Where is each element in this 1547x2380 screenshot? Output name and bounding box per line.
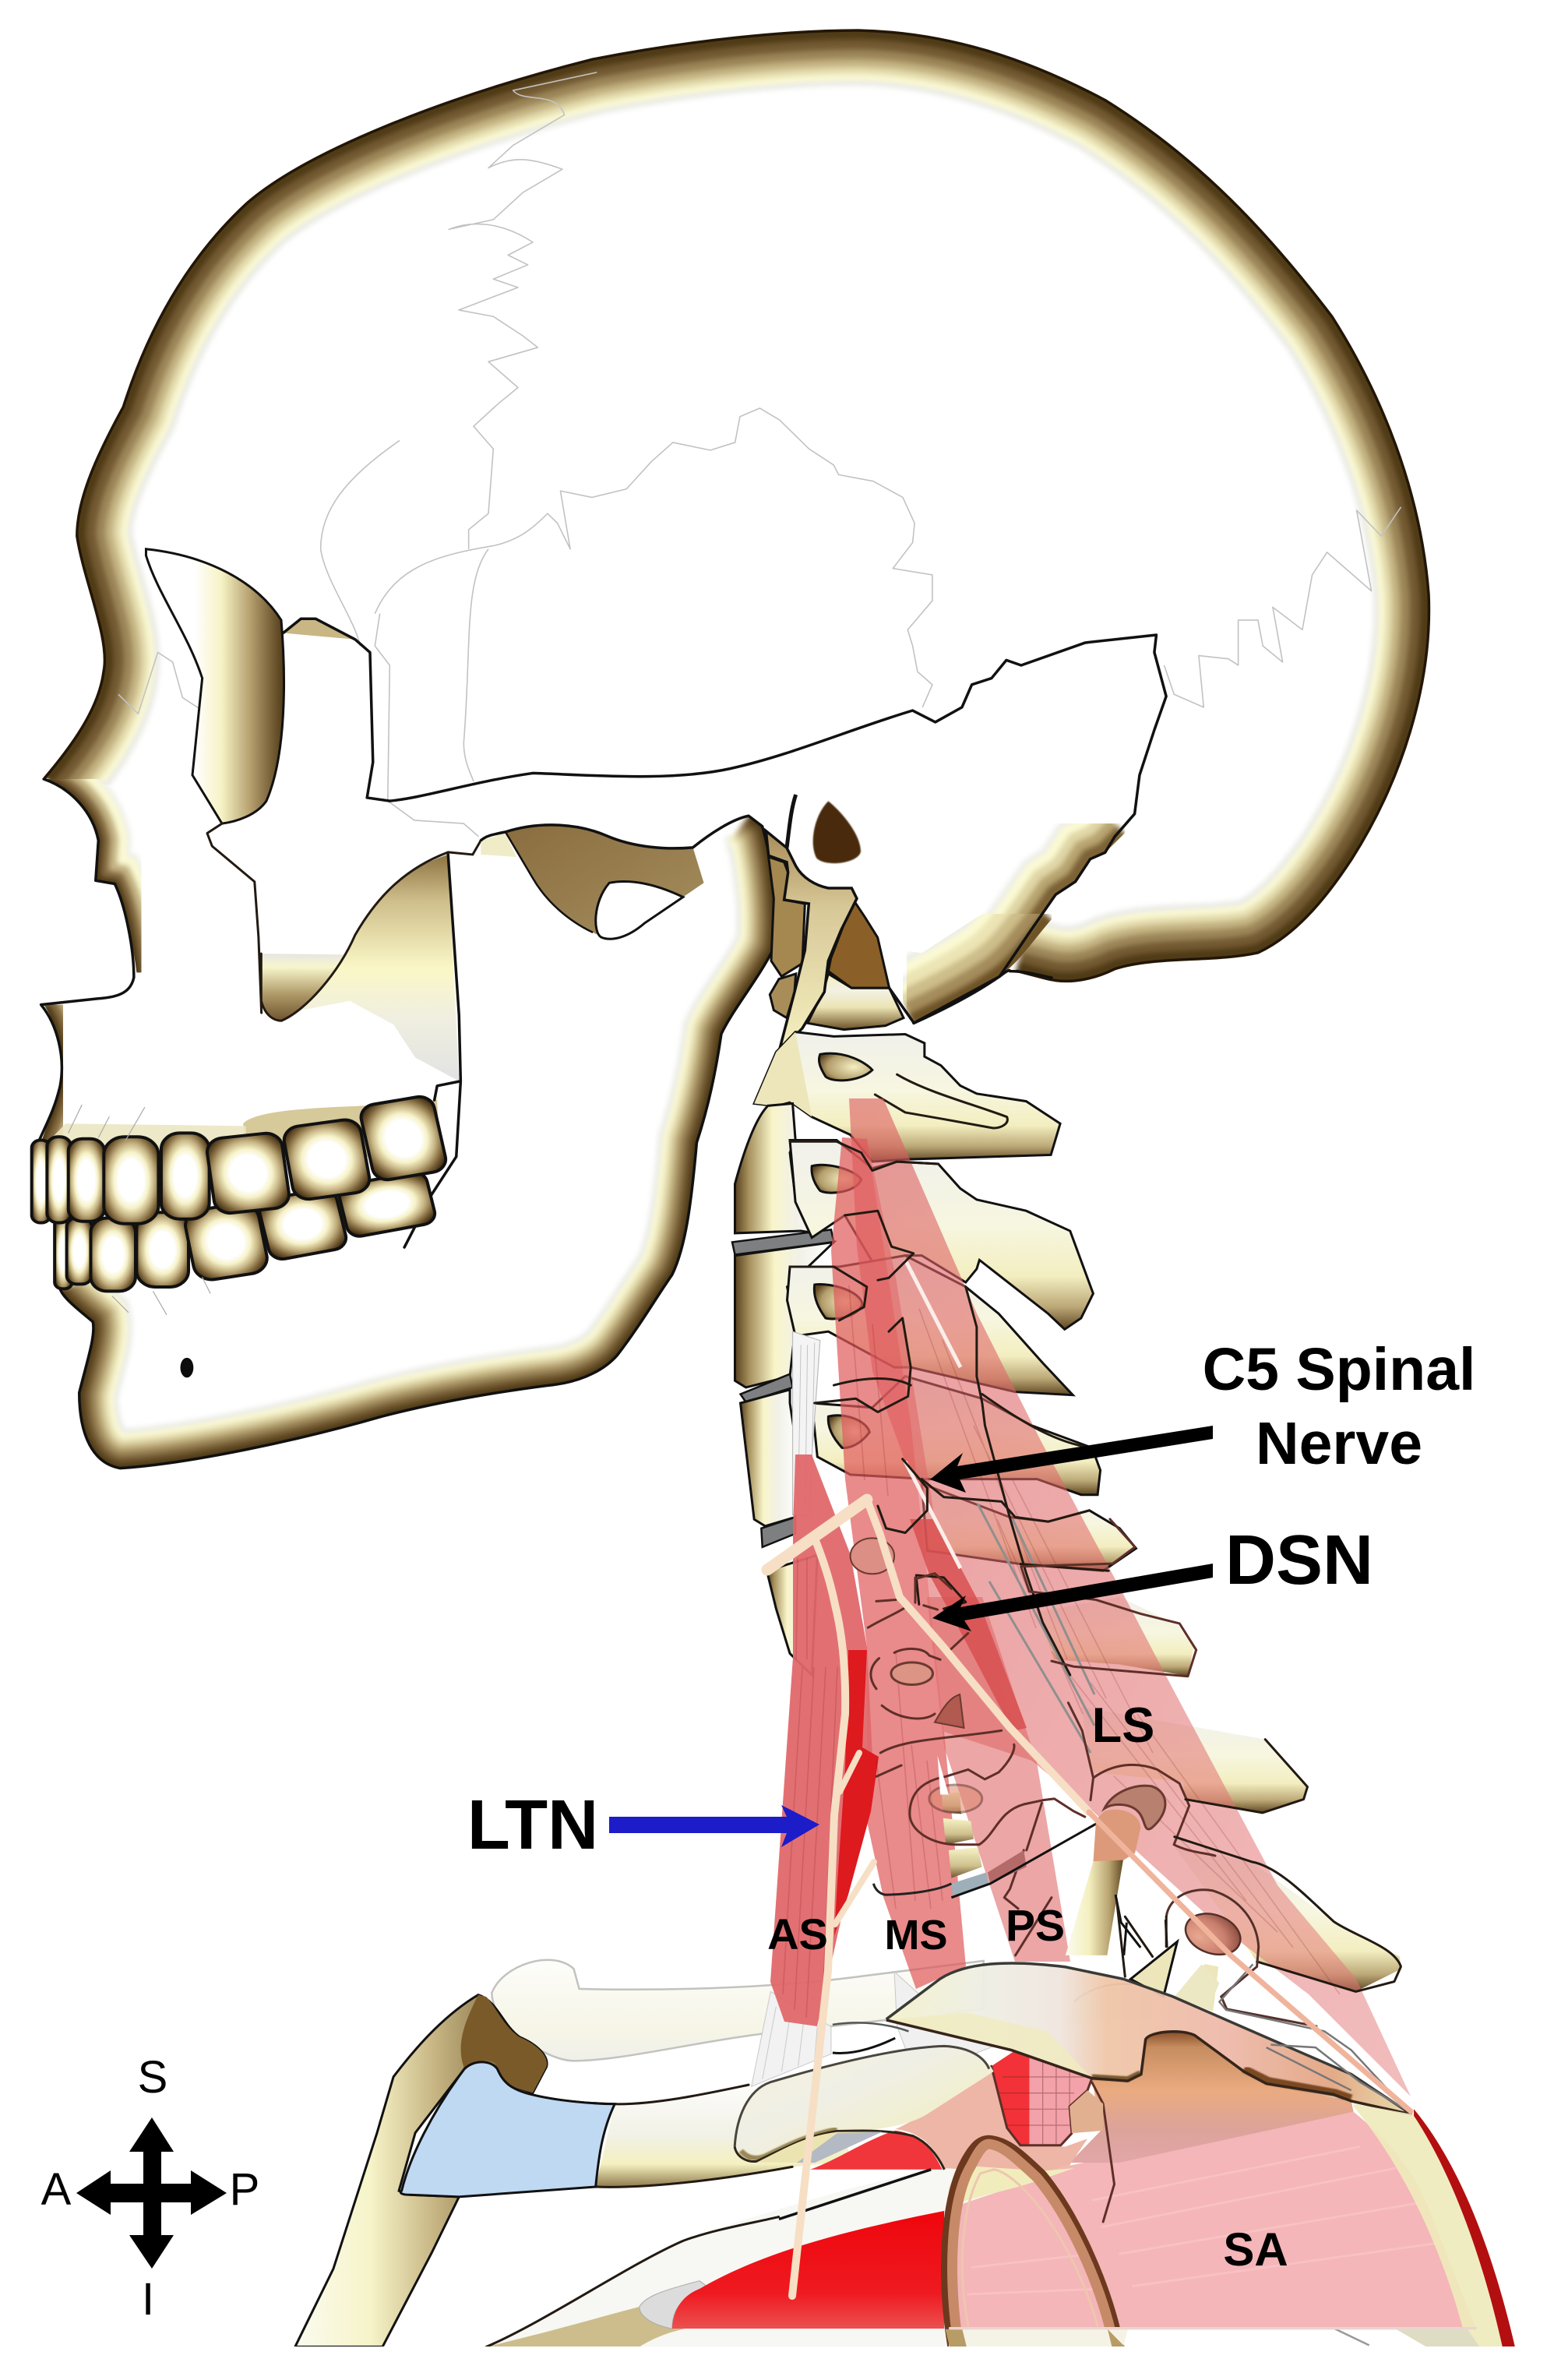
cranium bone rim [44, 30, 1429, 981]
left tan wedge [769, 857, 805, 976]
big clavicle [735, 2046, 994, 2161]
T2 ring [1166, 1890, 1317, 2026]
rib white tip behind spine [1065, 1987, 1154, 2026]
left condyle blob [770, 974, 796, 1018]
C7 cream patches [943, 1818, 974, 1845]
T2 crescent [1179, 1906, 1248, 1962]
gray tendon lines [978, 1504, 1094, 1753]
C7 tip outline [1186, 1740, 1308, 1813]
T1 tip [1175, 1846, 1401, 1991]
darker strip between MS and LS [910, 1519, 1027, 1731]
jaw, zygoma, coronoid and teeth [32, 779, 775, 1469]
C1 vertebra [754, 1032, 1060, 1162]
cream acromial border [1354, 2103, 1503, 2347]
disc C3-C4 [741, 1374, 793, 1402]
disc C4-C5 [761, 1517, 795, 1547]
C1 lateral mass line [875, 1074, 1007, 1128]
mastoid jagged bone band [914, 834, 1125, 1023]
serratus streaks [967, 2147, 1436, 2294]
vertebrae C6 to T1 with muscle overlay [868, 1519, 1215, 1955]
label: SA: SA [1223, 2223, 1288, 2276]
rib, clavicle and scapula bones [295, 1960, 993, 2347]
mandible rim [60, 816, 775, 1469]
serratus anterior pink sheet [944, 2112, 1476, 2329]
white gaps [938, 1756, 949, 1795]
peach pad [1070, 2090, 1103, 2133]
spine brown shadow [1092, 2069, 1351, 2099]
C5 foramen ring [851, 1538, 894, 1574]
tendinous white strips [905, 1260, 960, 1568]
lower rib [486, 2157, 984, 2347]
anterior scalene [770, 1454, 872, 2026]
acromion arch inner [953, 2144, 1114, 2347]
upper lip rim [42, 1005, 63, 1141]
arch cream cap [948, 2166, 1074, 2207]
orbit [146, 549, 1166, 1013]
label: DSN: DSN [1225, 1521, 1373, 1599]
long thoracic nerve [792, 1539, 845, 2296]
C7 foramen [929, 1785, 982, 1813]
T1 crescent [1105, 1786, 1165, 1829]
C3 transverse process [787, 1256, 1073, 1395]
label: LTN: LTN [467, 1786, 598, 1864]
acromion arch outer [945, 2138, 1121, 2347]
lower cervical white transverse tendons [793, 1331, 820, 1515]
rib cream tips [1175, 1964, 1219, 2010]
spine lower cream [886, 2012, 1092, 2079]
C5 body [766, 1555, 817, 1675]
thoracic gray rib lines [1219, 1964, 1405, 2109]
right brown wedge [828, 901, 890, 988]
arrow: LTN [609, 1805, 819, 1847]
T1 rib neck [1066, 1856, 1124, 1955]
label: LS: LS [1092, 1698, 1154, 1753]
peach sheet under spine [1070, 2032, 1354, 2163]
label: MS: MS [885, 1912, 947, 1959]
C3 body [735, 1242, 833, 1387]
clavicle lower shading [741, 2129, 837, 2158]
middle scalene [831, 1137, 966, 1989]
levator striations [919, 1309, 1340, 1994]
C6 tip [1037, 1597, 1193, 1676]
C2 body [734, 1102, 808, 1234]
C2 transverse process [790, 1141, 1093, 1329]
rib line [779, 2170, 931, 2220]
styloid process [766, 831, 857, 1052]
lower red muscle fade band [949, 2327, 1476, 2329]
mastoid outline [914, 837, 1115, 1023]
C4 body [741, 1390, 798, 1526]
first rib gray outlines [833, 1984, 1132, 2031]
label: PS: PS [1006, 1901, 1065, 1951]
skull [32, 30, 1429, 1469]
C4 transverse process [812, 1377, 1101, 1495]
disc C2-C3 [732, 1229, 833, 1254]
compass letters: A [41, 2164, 72, 2215]
pale base band [949, 2329, 1128, 2347]
C7 ring lines [910, 1744, 1085, 1955]
upper right vertebral lines [1021, 1519, 1196, 1778]
C6 groove [935, 1694, 964, 1728]
arch thin line [962, 2170, 1098, 2329]
upper teeth [32, 1095, 449, 1224]
costal cartilage [400, 2062, 615, 2197]
compass letters: P [230, 2164, 259, 2215]
T2 and thoracic elements [1117, 1740, 1401, 2026]
cervical spine bones [732, 1032, 1136, 1675]
first rib with shoulder bone [295, 1995, 852, 2347]
rib tips [1130, 1941, 1177, 1997]
levator scapulae [849, 1098, 1411, 2096]
arrow: C5 spinal nerve [930, 1426, 1213, 1493]
clavicle [492, 1960, 984, 2061]
anterior scalene bright strip [834, 1650, 879, 1936]
mental foramen [180, 1358, 193, 1377]
label: C5 Spinal Nerve: C5 Spinal [1203, 1336, 1475, 1403]
shoulder overlay: scapula, sheets and clavicle [735, 1963, 1515, 2347]
C6 ring [868, 1574, 1002, 1776]
compass [41, 2052, 259, 2325]
nerves [767, 1500, 1411, 2296]
spine outline [886, 1963, 1411, 2114]
tendon fan of anterior scalene [752, 1972, 993, 2086]
cranium outline [44, 30, 1429, 981]
label: C5 Spinal Nerve: Nerve [1256, 1410, 1422, 1477]
disc beneath C7 [951, 1873, 989, 1896]
arch foot marks [946, 2329, 1126, 2347]
C6 foramen [891, 1662, 932, 1684]
occipital tip bone band [914, 919, 1052, 1023]
upper muscle fill between slips [867, 1139, 1037, 1762]
red muscle strip [810, 2131, 943, 2170]
posterior scalene [927, 1597, 1070, 1962]
dorsal scapular nerve [867, 1500, 1089, 1812]
label: AS: AS [767, 1909, 828, 1959]
T1 tip outline [1175, 1837, 1401, 1991]
middle scalene striations [849, 1285, 943, 1909]
muscle layer [672, 1098, 1411, 2329]
dark red border [1414, 2109, 1515, 2347]
compass letters: S [138, 2052, 167, 2103]
long thoracic branches [835, 1753, 874, 1924]
C5 root trunk [767, 1500, 867, 1570]
occipital condyle [808, 974, 904, 1030]
ear canal [813, 801, 861, 863]
compass letters: I [142, 2274, 154, 2325]
nerve-like brown line [1092, 2082, 1114, 2222]
scapular spine [886, 1963, 1411, 2114]
lower teeth [55, 1170, 437, 1291]
face rim: nose and upper jaw [44, 779, 136, 982]
right base band [1396, 2329, 1480, 2347]
T1 ring [1091, 1765, 1215, 1856]
clavicle outline [735, 2046, 989, 2147]
occipital tip outline [890, 971, 1052, 1023]
serratus anterior: red lower part [672, 2211, 944, 2329]
left peach wedge [895, 2069, 1087, 2174]
lower transverse processes beneath muscle [1037, 1597, 1401, 1991]
C5 transverse process [922, 1483, 1136, 1571]
grid muscle square [992, 2050, 1092, 2146]
compass arrows [76, 2117, 227, 2269]
clavicle under band [757, 2132, 882, 2163]
foramina [819, 1053, 872, 1081]
arrow: DSN [932, 1564, 1213, 1631]
C7 tip [1081, 1707, 1308, 1813]
anterior scalene striations [783, 1558, 837, 2018]
cranial sutures [118, 72, 1401, 837]
dorsal scapular nerve distal [1089, 1812, 1411, 2111]
vertebra outlines over muscle, upper neck [790, 1141, 1108, 1675]
mastoid and styloid region [766, 795, 1052, 1052]
